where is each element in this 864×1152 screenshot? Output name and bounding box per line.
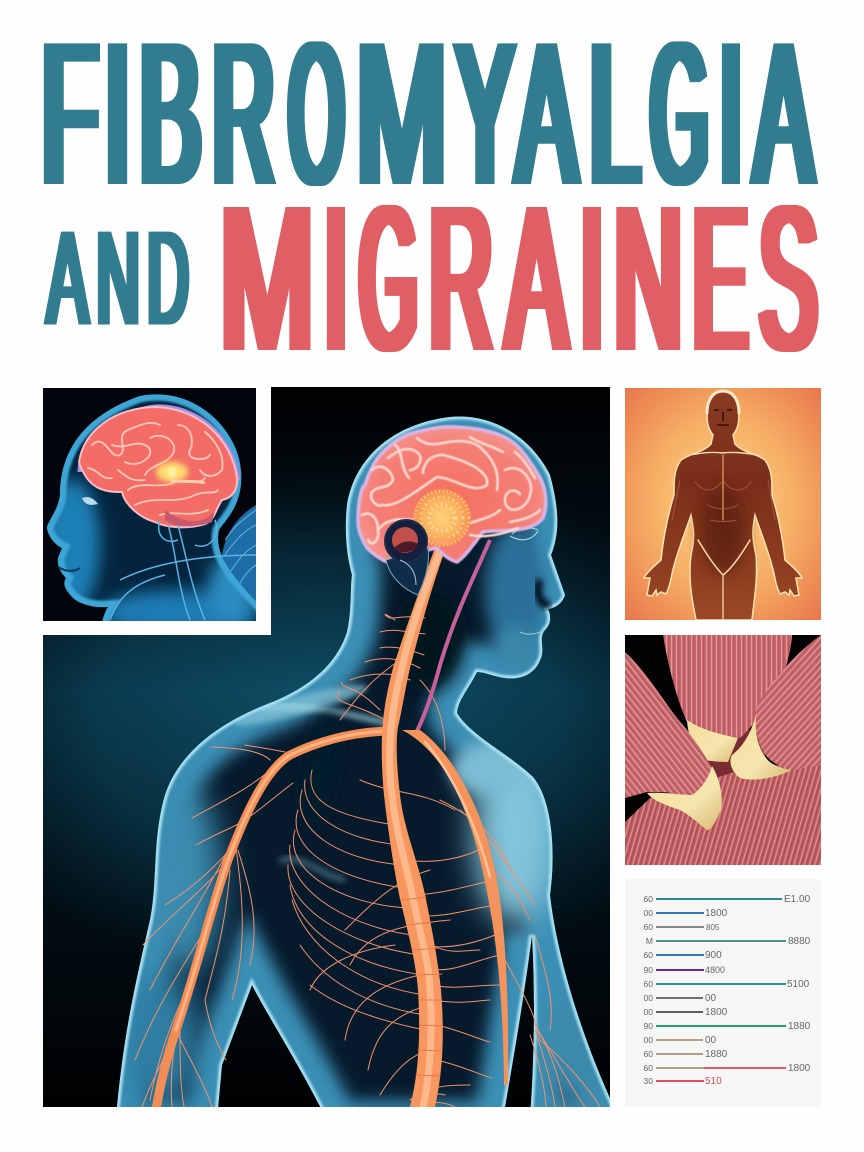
- title line: Fibromyalgia: G: [651, 2, 708, 226]
- hot spot: [156, 462, 188, 482]
- fine nerve branches: [135, 614, 600, 1107]
- thick orange arm nerve: [156, 731, 388, 1110]
- panel: brain in head profile: [43, 388, 256, 621]
- center shadow: [707, 730, 765, 778]
- bar lines: [656, 899, 786, 1081]
- row labels left: M: [646, 936, 653, 946]
- title word: And: A: [47, 204, 88, 352]
- thick orange chest nerve: [402, 730, 508, 1085]
- ribs left of spine: [311, 770, 395, 825]
- row labels left: 00: [644, 993, 653, 1003]
- row labels left: 60: [644, 894, 653, 904]
- spinal cord: [382, 545, 447, 1107]
- title line: Fibromyalgia: L: [590, 2, 640, 226]
- brain stem neck of spine: [430, 538, 452, 545]
- face shading: [714, 410, 732, 425]
- title line: Fibromyalgia: Y: [456, 2, 514, 226]
- pink vagus nerve: [417, 540, 490, 731]
- darker torso shading: [701, 485, 745, 575]
- panel: full-body muscle figure: [625, 388, 821, 620]
- row labels left: 90: [644, 965, 653, 975]
- main brain: [358, 427, 546, 562]
- title word: Migraines: M: [220, 166, 314, 392]
- ribs right of spine: [416, 850, 478, 862]
- row labels left: 90: [644, 1021, 653, 1031]
- row values right: E1.00: [784, 894, 811, 905]
- top tendon: [687, 720, 738, 762]
- title line: Fibromyalgia: I: [720, 2, 741, 226]
- title word: Migraines: I: [582, 166, 602, 392]
- row values right: 1880: [788, 1021, 811, 1032]
- title word: Migraines: N: [614, 166, 682, 392]
- row values right: 510: [705, 1076, 722, 1087]
- row values right: [705, 894, 811, 1087]
- title word: Migraines: E: [693, 166, 748, 392]
- right tendon: [730, 712, 792, 780]
- row labels left: 00: [644, 908, 653, 918]
- row values right: 1800: [705, 908, 728, 919]
- title: D: [147, 204, 189, 352]
- brain: [79, 407, 237, 527]
- brain stem and neck lines: [110, 520, 256, 620]
- row labels left: [644, 894, 653, 1086]
- title line: Fibromyalgia: M: [356, 2, 447, 226]
- row values right: 00: [705, 1035, 717, 1046]
- title: [42, 2, 817, 392]
- head silhouette: [47, 394, 256, 621]
- left muscle bundle: [625, 652, 712, 798]
- left tendon: [647, 766, 722, 830]
- panel: muscle bundles: [625, 635, 821, 865]
- panel: line chart legend: [625, 879, 821, 1107]
- row values right: 5100: [787, 979, 810, 990]
- row values right: 1800: [705, 1007, 728, 1018]
- ear with inner detail: [385, 520, 428, 595]
- row labels left: 30: [644, 1076, 653, 1086]
- row labels left: 60: [644, 1063, 653, 1073]
- row labels left: 60: [644, 1049, 653, 1059]
- title line: Fibromyalgia: F: [42, 2, 98, 226]
- title word: And: N: [96, 204, 140, 352]
- row values right: 00: [705, 993, 717, 1004]
- orange nerve trunks: [156, 545, 508, 1110]
- lower muscle mass: [625, 760, 821, 865]
- panel: main nervous system figure: [43, 387, 630, 1140]
- title line: Fibromyalgia: B: [140, 2, 201, 226]
- row values right: 1800: [788, 1063, 811, 1074]
- row values right: 900: [705, 950, 722, 961]
- row labels left: 60: [644, 979, 653, 989]
- row values right: 1880: [705, 1049, 728, 1060]
- row labels left: 00: [644, 1035, 653, 1045]
- right muscle bundle: [754, 635, 821, 770]
- body silhouette: [117, 416, 610, 1107]
- row labels left: 00: [644, 1007, 653, 1017]
- top muscle bundle: [663, 635, 792, 738]
- row labels left: 60: [644, 922, 653, 932]
- title line: Fibromyalgia: O: [289, 2, 344, 226]
- row values right: 4800: [705, 965, 725, 975]
- title word: Migraines: I: [326, 166, 346, 392]
- title line: Fibromyalgia: A: [517, 2, 577, 226]
- glowing thalamus: [413, 489, 471, 547]
- title line: Fibromyalgia: R: [213, 2, 274, 226]
- title word: Migraines: R: [430, 166, 492, 392]
- title word: Migraines: G: [360, 166, 417, 392]
- title word: Migraines: A: [507, 166, 567, 392]
- title line: Fibromyalgia: I: [106, 2, 130, 226]
- head and body highlights: [707, 391, 739, 413]
- eye: [82, 497, 98, 505]
- right forearm nerves: [535, 1025, 585, 1107]
- row values right: 8880: [788, 936, 811, 947]
- shoulder behind head: [222, 505, 256, 601]
- row labels left: 60: [644, 950, 653, 960]
- body outline: [644, 391, 802, 620]
- row values right: 805: [706, 923, 720, 932]
- inset white frame: [43, 387, 271, 635]
